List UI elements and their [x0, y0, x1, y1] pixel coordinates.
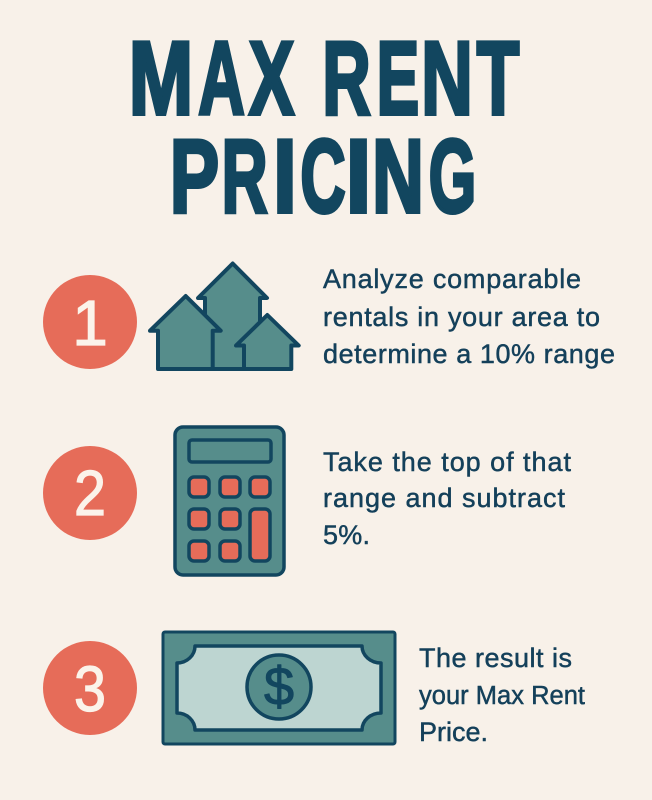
title: C [300, 119, 346, 235]
title: T [477, 21, 519, 137]
icon: houses [150, 264, 299, 369]
number badge 3 [43, 641, 137, 735]
title: X [249, 21, 294, 137]
step 1 text [323, 264, 615, 369]
step 3 text [419, 643, 585, 747]
title: M [129, 21, 193, 137]
step 2 text: 5%. [323, 520, 370, 550]
title: I [273, 119, 297, 235]
title: R [322, 21, 371, 137]
step 2 text: range and subtract [323, 483, 565, 513]
title: N [372, 119, 424, 235]
title: A [198, 21, 245, 137]
icon: calculator [175, 427, 284, 575]
dollar sign: $ [264, 657, 294, 717]
title: P [170, 119, 219, 235]
title: N [421, 21, 473, 137]
number badge 1 [43, 275, 137, 369]
step 3 text: Price. [419, 717, 488, 747]
step 3 text: your Max Rent [419, 682, 585, 710]
title: G [429, 119, 476, 235]
title: R [222, 119, 268, 235]
number badge 3: 3 [74, 653, 106, 725]
step 3 [43, 632, 585, 747]
step 1 text: Analyze comparable [323, 264, 581, 294]
step 1 [43, 264, 615, 369]
step 2 text: Take the top of that [323, 447, 571, 477]
step 3 text: The result is [419, 643, 572, 673]
number badge 2: 2 [74, 457, 106, 529]
title: I [346, 119, 371, 235]
step 2 [43, 427, 571, 575]
step 1 text: determine a 10% range [323, 339, 615, 369]
title [129, 21, 519, 235]
title: E [377, 21, 419, 137]
number badge 2 [43, 446, 137, 540]
step 1 text: rentals in your area to [323, 302, 600, 332]
icon: dollar bill [163, 632, 395, 744]
number badge 1: 1 [72, 287, 108, 359]
step 2 text [323, 447, 571, 550]
